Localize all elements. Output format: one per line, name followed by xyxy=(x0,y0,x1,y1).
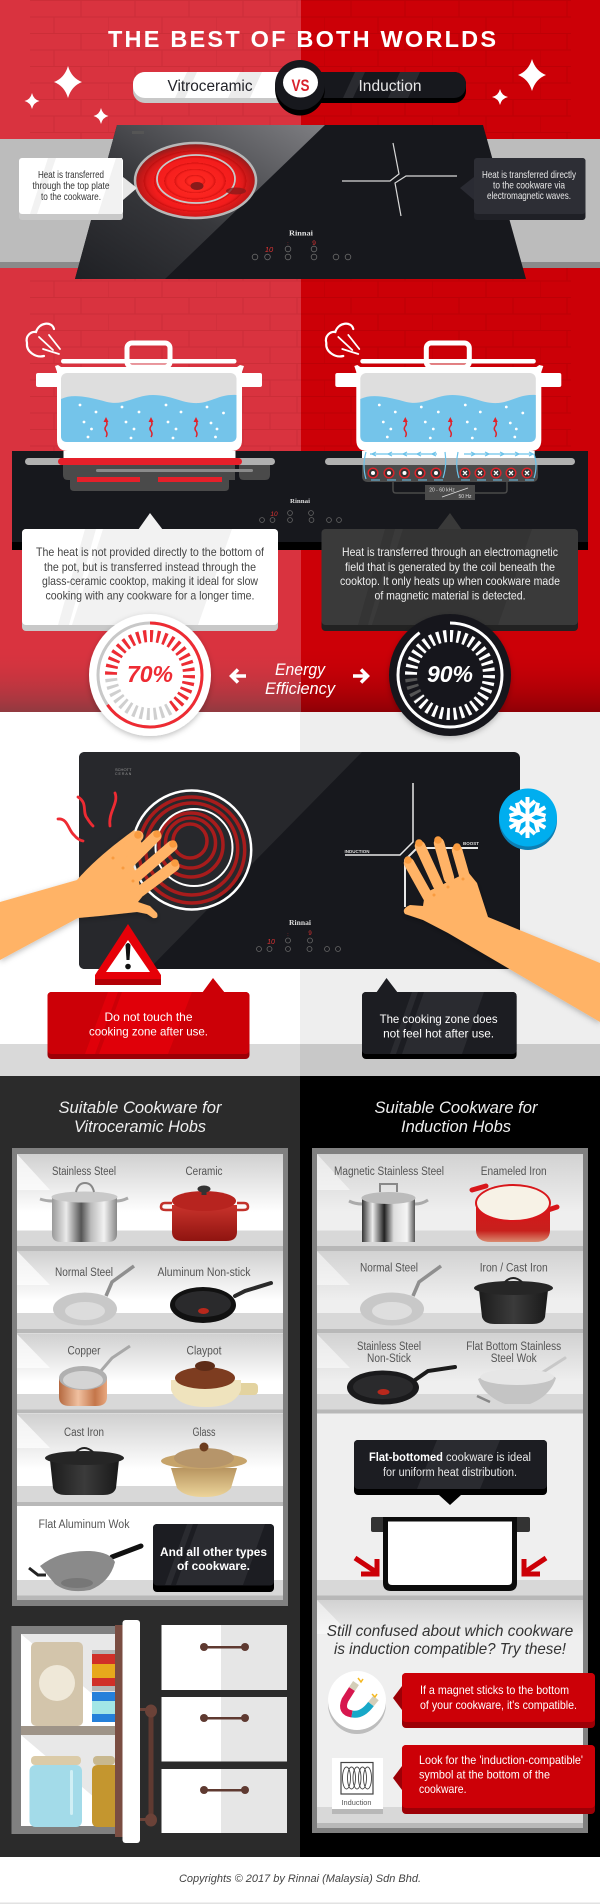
top-view cooktop: BOOST xyxy=(463,841,479,846)
callout: magnet test: of your cookware, it's compatible. xyxy=(420,1698,577,1712)
callout: flat-bottomed cookware xyxy=(354,1440,547,1505)
item: flat aluminum wok: Flat Aluminum Wok xyxy=(38,1519,130,1531)
heading: vitroceramic cookware xyxy=(58,1098,223,1136)
induction zone lines xyxy=(342,143,457,216)
heading: still confused: Still confused about which cookware xyxy=(327,1623,573,1640)
item: normal steel pan xyxy=(53,1266,134,1326)
induction zone lines xyxy=(345,783,478,907)
callout: flat-bottomed cookware: Flat-bottomed cookware is ideal xyxy=(369,1452,531,1464)
arrow: left inward xyxy=(355,1558,377,1574)
pill: induction xyxy=(300,72,466,103)
gauge: 90% energy efficiency: 90% xyxy=(427,661,473,687)
item: cast iron pot xyxy=(45,1427,124,1495)
brand and controls: Rinnai xyxy=(289,918,311,927)
arrow: left xyxy=(232,670,246,682)
callout: vitroceramic explanation: glass-ceramic cooktop, making it ideal for slow xyxy=(42,574,258,588)
item: stainless steel non-stick pan xyxy=(347,1341,455,1404)
copyright footer: Copyrights © 2017 by Rinnai (Malaysia) Sdn Bhd. xyxy=(179,1873,421,1885)
cabinet door xyxy=(115,1620,157,1843)
heading: induction cookware: Induction Hobs xyxy=(401,1117,511,1136)
callout: induction explanation: Heat is transferred through an electromagnetic xyxy=(342,545,558,559)
pill: induction: Induction xyxy=(358,78,422,95)
shelf rows xyxy=(17,1154,283,1600)
VS badge xyxy=(275,60,325,116)
brand and controls: 9 xyxy=(308,931,312,937)
callout: induction explanation: field that is generated by the coil beneath the xyxy=(345,560,555,574)
sparkles xyxy=(24,59,546,124)
heading: still confused: is induction compatible? Try these! xyxy=(334,1641,567,1658)
item: claypot xyxy=(171,1346,258,1407)
panel: suitable cookware background xyxy=(0,1076,600,1904)
brand and controls: Rinnai xyxy=(289,228,313,238)
item: magnetic stainless steel pot xyxy=(334,1166,444,1242)
background: header and comparison red walls xyxy=(0,0,600,713)
item: aluminum non-stick pan xyxy=(158,1267,271,1323)
frequency converter: 50 Hz xyxy=(458,494,472,500)
callout: induction heat transfer xyxy=(460,158,586,220)
arrow: right inward xyxy=(524,1558,546,1574)
icon: induction symbol: Induction xyxy=(342,1798,372,1807)
callout: do not touch xyxy=(48,978,250,1059)
callout: vitroceramic explanation: the pot, but is transferred instead through the xyxy=(44,560,256,574)
callout: flat-bottomed cookware: for uniform heat distribution. xyxy=(383,1467,517,1479)
item: normal steel pan: Normal Steel xyxy=(55,1267,113,1279)
top-view cooktop: INDUCTION xyxy=(344,849,370,854)
item: cast iron pot: Cast Iron xyxy=(64,1427,104,1439)
callout: induction symbol xyxy=(393,1745,595,1814)
magnetic field arrows xyxy=(364,452,536,480)
icon: magnet xyxy=(328,1671,386,1734)
top-view cooktop xyxy=(79,752,520,969)
icon: flat-bottomed pot xyxy=(355,1517,546,1591)
item: copper pan xyxy=(59,1346,130,1406)
panel: induction shelves xyxy=(312,1148,595,1833)
right hand touching cool zone xyxy=(404,836,600,1022)
item: cans xyxy=(92,1650,115,1722)
top-view cooktop: SCHOTT xyxy=(115,767,132,772)
item: copper pan: Copper xyxy=(68,1346,101,1358)
arrow: right xyxy=(353,670,368,682)
callout: does not feel hot: not feel hot after use. xyxy=(383,1026,494,1040)
gauge: 90% energy efficiency xyxy=(389,614,511,736)
callout: vitroceramic explanation: The heat is not provided directly to the bottom of xyxy=(36,545,265,559)
induction coil xyxy=(362,465,538,482)
icon: snowflake xyxy=(499,788,557,850)
brand and controls: 10 xyxy=(267,939,275,946)
illustration: open cabinet xyxy=(12,1620,157,1843)
item: enameled iron pot: Enameled Iron xyxy=(481,1166,547,1178)
callout: all other cookware xyxy=(153,1524,274,1592)
callout: magnet test xyxy=(393,1673,595,1728)
radiant burner xyxy=(135,143,256,218)
callout: does not feel hot: The cooking zone does xyxy=(380,1012,498,1026)
callout: do not touch: Do not touch the xyxy=(104,1010,193,1024)
icon: induction symbol xyxy=(332,1758,383,1814)
brand and controls: : xyxy=(287,932,289,938)
callout: vitroceramic heat transfer: through the top plate xyxy=(32,180,110,192)
cooktop cross-section band: Rinnai xyxy=(290,498,310,505)
item: glass pot xyxy=(161,1427,247,1497)
panel: vitroceramic shelves xyxy=(12,1148,288,1606)
callout: induction symbol: Look for the 'induction-compatible' xyxy=(419,1753,583,1767)
callout: induction heat transfer: electromagnetic waves. xyxy=(487,190,571,202)
VS badge: VS xyxy=(292,76,310,95)
item: iron cast iron pot xyxy=(474,1262,553,1324)
left hand touching hot zone xyxy=(0,830,179,960)
callout: all other cookware: of cookware. xyxy=(177,1561,250,1573)
item: ceramic pot: Ceramic xyxy=(186,1166,223,1178)
frequency converter: 20 - 60 kHz xyxy=(429,488,455,494)
top-view cooktop: CERAN xyxy=(115,772,132,776)
callout: do not touch: cooking zone after use. xyxy=(89,1024,208,1038)
cooktop cross-section band xyxy=(12,451,588,550)
energy efficiency label: Efficiency xyxy=(265,680,337,698)
energy efficiency label: Energy xyxy=(275,661,327,679)
item: claypot: Claypot xyxy=(186,1346,222,1358)
versus pills xyxy=(133,60,466,116)
heading: induction cookware: Suitable Cookware for xyxy=(374,1098,539,1117)
title: THE BEST OF BOTH WORLDS xyxy=(108,26,496,52)
item: stainless steel non-stick pan: Non-Stick xyxy=(367,1353,411,1365)
brand and controls xyxy=(252,228,351,260)
item: normal steel pan: Normal Steel xyxy=(360,1262,418,1274)
callout: all other cookware: And all other types xyxy=(160,1547,267,1559)
item: flat aluminum wok xyxy=(29,1519,141,1591)
item: jars xyxy=(30,1756,115,1827)
brand and controls xyxy=(256,918,340,952)
callout: vitroceramic heat transfer xyxy=(19,158,137,220)
item: iron cast iron pot: Iron / Cast Iron xyxy=(480,1262,548,1274)
shelf rows xyxy=(317,1154,583,1828)
illustration: drawers xyxy=(162,1625,287,1833)
callout: induction symbol: symbol at the bottom of the xyxy=(419,1768,550,1782)
callout: does not feel hot xyxy=(362,978,517,1059)
item: aluminum non-stick pan: Aluminum Non-stick xyxy=(158,1267,251,1279)
item: flat bottom stainless steel wok: Steel Wok xyxy=(491,1353,537,1365)
item: food box xyxy=(31,1642,83,1726)
cooktop cross-section band: 10 xyxy=(270,511,278,518)
item: stainless steel pot: Stainless Steel xyxy=(52,1166,116,1178)
item: enameled iron pot xyxy=(472,1166,557,1242)
gauge: 70% energy efficiency xyxy=(89,614,211,736)
pill: vitroceramic: Vitroceramic xyxy=(168,78,253,95)
heading: vitroceramic cookware: Suitable Cookware for xyxy=(58,1098,223,1117)
gauge: 70% energy efficiency: 70% xyxy=(127,661,173,687)
heading: still confused xyxy=(327,1623,573,1658)
item: glass pot: Glass xyxy=(192,1427,216,1439)
residual heat burner xyxy=(132,790,251,910)
item: magnetic stainless steel pot: Magnetic Stainless Steel xyxy=(334,1166,444,1178)
item: ceramic pot xyxy=(161,1166,248,1241)
callout: induction symbol: cookware. xyxy=(419,1782,466,1796)
heating element xyxy=(63,465,270,491)
pot: vitroceramic xyxy=(27,324,270,491)
heading: induction cookware xyxy=(374,1098,539,1136)
callout: induction explanation: cooktop. It only heats up when cookware made xyxy=(340,574,560,588)
pot: induction xyxy=(326,324,561,500)
brand and controls: 9 xyxy=(312,240,316,247)
item: stainless steel non-stick pan: Stainless Steel xyxy=(357,1341,421,1353)
callout: vitroceramic explanation xyxy=(22,513,278,631)
brand and controls: : xyxy=(287,241,289,247)
callout: magnet test: If a magnet sticks to the bottom xyxy=(420,1683,569,1697)
heading: vitroceramic cookware: Vitroceramic Hobs xyxy=(74,1117,206,1136)
callout: vitroceramic explanation: cooking with any cookware for a longer time. xyxy=(46,588,254,602)
warning sign xyxy=(95,924,161,985)
heat waves xyxy=(58,793,116,841)
item: flat bottom stainless steel wok xyxy=(466,1341,565,1404)
brand and controls: 10 xyxy=(265,245,274,254)
item: flat bottom stainless steel wok: Flat Bottom Stainless xyxy=(466,1341,561,1353)
callout: induction explanation: of magnetic material is detected. xyxy=(374,588,526,602)
pill: vitroceramic xyxy=(133,72,303,103)
perspective cooktop xyxy=(75,125,526,279)
comparison section white background xyxy=(0,712,600,1076)
item: stainless steel pot xyxy=(40,1166,128,1242)
frequency converter xyxy=(393,482,507,500)
callout: vitroceramic heat transfer: Heat is transferred xyxy=(38,169,104,181)
callout: induction explanation xyxy=(322,513,578,631)
energy efficiency label xyxy=(232,661,368,698)
callout: induction heat transfer: to the cookware via xyxy=(493,180,565,192)
callout: vitroceramic heat transfer: to the cookware. xyxy=(41,191,101,203)
item: normal steel pan xyxy=(360,1262,441,1326)
